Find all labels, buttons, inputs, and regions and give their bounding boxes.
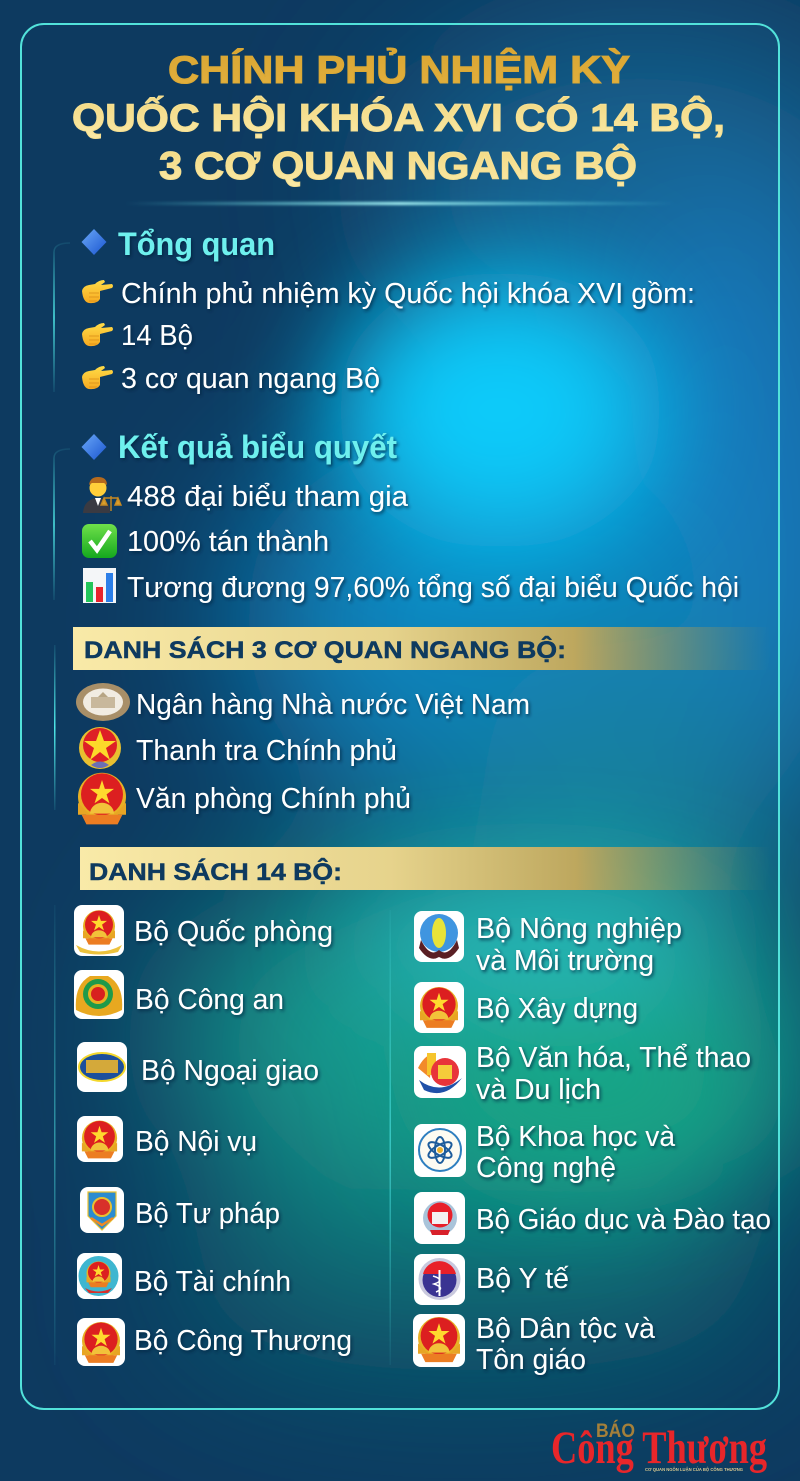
text line: Tương đương 97,60% tổng số đại biểu Quốc hội bbox=[127, 572, 739, 604]
text line: 488 đại biểu tham gia bbox=[127, 481, 409, 513]
bracket line bbox=[54, 449, 70, 600]
item: public security: Bộ Công an bbox=[135, 984, 284, 1016]
item: justice bbox=[80, 1187, 280, 1233]
icon: blue diamond bbox=[82, 229, 106, 255]
item: construction bbox=[414, 982, 638, 1033]
bracket line bbox=[54, 243, 70, 392]
banner bbox=[80, 847, 770, 890]
item: industry and trade bbox=[77, 1318, 352, 1366]
text line: 14 Bộ bbox=[121, 320, 193, 352]
title: CHÍNH PHỦ NHIỆM KỲ bbox=[168, 48, 630, 92]
icon: judge bbox=[83, 477, 121, 513]
item: agriculture and environment: Bộ Nông nghiệp bbox=[476, 913, 682, 945]
heading: voting result: Kết quả biểu quyết bbox=[118, 429, 397, 465]
item: public security bbox=[74, 970, 284, 1019]
item: ethnic and religious affairs: Tôn giáo bbox=[476, 1344, 586, 1376]
title divider bbox=[125, 202, 675, 205]
logo: Báo Công Thương: CƠ QUAN NGÔN LUẬN CỦA BỘ CÔNG THƯƠNG bbox=[645, 1465, 743, 1472]
section: voting result bbox=[54, 429, 739, 604]
icon: blue diamond bbox=[82, 434, 106, 460]
item: science and technology: Công nghệ bbox=[476, 1152, 616, 1184]
item: finance bbox=[77, 1253, 291, 1299]
banner: DANH SÁCH 14 BỘ: bbox=[89, 858, 342, 886]
item: defence bbox=[74, 905, 333, 956]
item: agriculture and environment: và Môi trường bbox=[476, 945, 654, 977]
item: science and technology bbox=[414, 1121, 676, 1184]
icon: pointing hand bbox=[82, 323, 113, 346]
item: industry and trade: Bộ Công Thương bbox=[134, 1325, 352, 1357]
item: ethnic and religious affairs: Bộ Dân tộc và bbox=[476, 1313, 656, 1345]
item: defence: Bộ Quốc phòng bbox=[134, 916, 333, 948]
column divider bbox=[390, 910, 391, 1365]
item: culture, sports and tourism bbox=[414, 1042, 751, 1106]
heading: overview: Tổng quan bbox=[118, 226, 275, 262]
title: 3 CƠ QUAN NGANG BỘ bbox=[159, 143, 637, 188]
section: 3 ministerial-level agencies bbox=[54, 627, 770, 824]
item: construction: Bộ Xây dựng bbox=[476, 993, 638, 1025]
icon: national emblem bbox=[78, 773, 126, 824]
icon: check mark bbox=[82, 524, 117, 558]
icon: pointing hand bbox=[82, 280, 113, 303]
item: finance: Bộ Tài chính bbox=[134, 1266, 291, 1298]
icon: inspectorate bbox=[79, 727, 121, 769]
item: health: Bộ Y tế bbox=[476, 1263, 569, 1295]
banner: DANH SÁCH 3 CƠ QUAN NGANG BỘ: bbox=[84, 636, 566, 664]
item: science and technology: Bộ Khoa học và bbox=[476, 1121, 676, 1153]
item: home affairs: Bộ Nội vụ bbox=[135, 1126, 257, 1158]
text line: 3 cơ quan ngang Bộ bbox=[121, 363, 380, 395]
icon: state bank bbox=[76, 683, 130, 721]
text line: Văn phòng Chính phủ bbox=[136, 783, 411, 815]
text line: Thanh tra Chính phủ bbox=[136, 735, 397, 767]
section: overview bbox=[54, 226, 695, 395]
icon: bar chart bbox=[83, 568, 116, 603]
item: agriculture and environment bbox=[414, 911, 682, 977]
item: culture, sports and tourism: và Du lịch bbox=[476, 1074, 601, 1106]
banner bbox=[73, 627, 770, 670]
item: foreign affairs: Bộ Ngoại giao bbox=[141, 1055, 319, 1087]
title bbox=[72, 48, 725, 188]
text line: 100% tán thành bbox=[127, 526, 329, 558]
title: QUỐC HỘI KHÓA XVI CÓ 14 BỘ, bbox=[72, 95, 725, 140]
item: health bbox=[414, 1254, 569, 1305]
item: home affairs bbox=[77, 1116, 257, 1162]
side line bbox=[54, 645, 56, 810]
item: ethnic and religious affairs bbox=[413, 1313, 656, 1376]
item: foreign affairs bbox=[77, 1042, 319, 1092]
section: 14 ministries bbox=[54, 847, 771, 1376]
item: education and training: Bộ Giáo dục và Đào tạo bbox=[476, 1204, 771, 1236]
text line: Ngân hàng Nhà nước Việt Nam bbox=[136, 689, 530, 721]
side line bbox=[54, 905, 56, 1365]
icon: pointing hand bbox=[82, 366, 113, 389]
item: education and training bbox=[414, 1192, 771, 1244]
text line: Chính phủ nhiệm kỳ Quốc hội khóa XVI gồm: bbox=[121, 278, 695, 310]
logo: Báo Công Thương: BÁO bbox=[596, 1420, 635, 1442]
item: justice: Bộ Tư pháp bbox=[135, 1198, 280, 1230]
item: culture, sports and tourism: Bộ Văn hóa, Thể thao bbox=[476, 1042, 751, 1074]
